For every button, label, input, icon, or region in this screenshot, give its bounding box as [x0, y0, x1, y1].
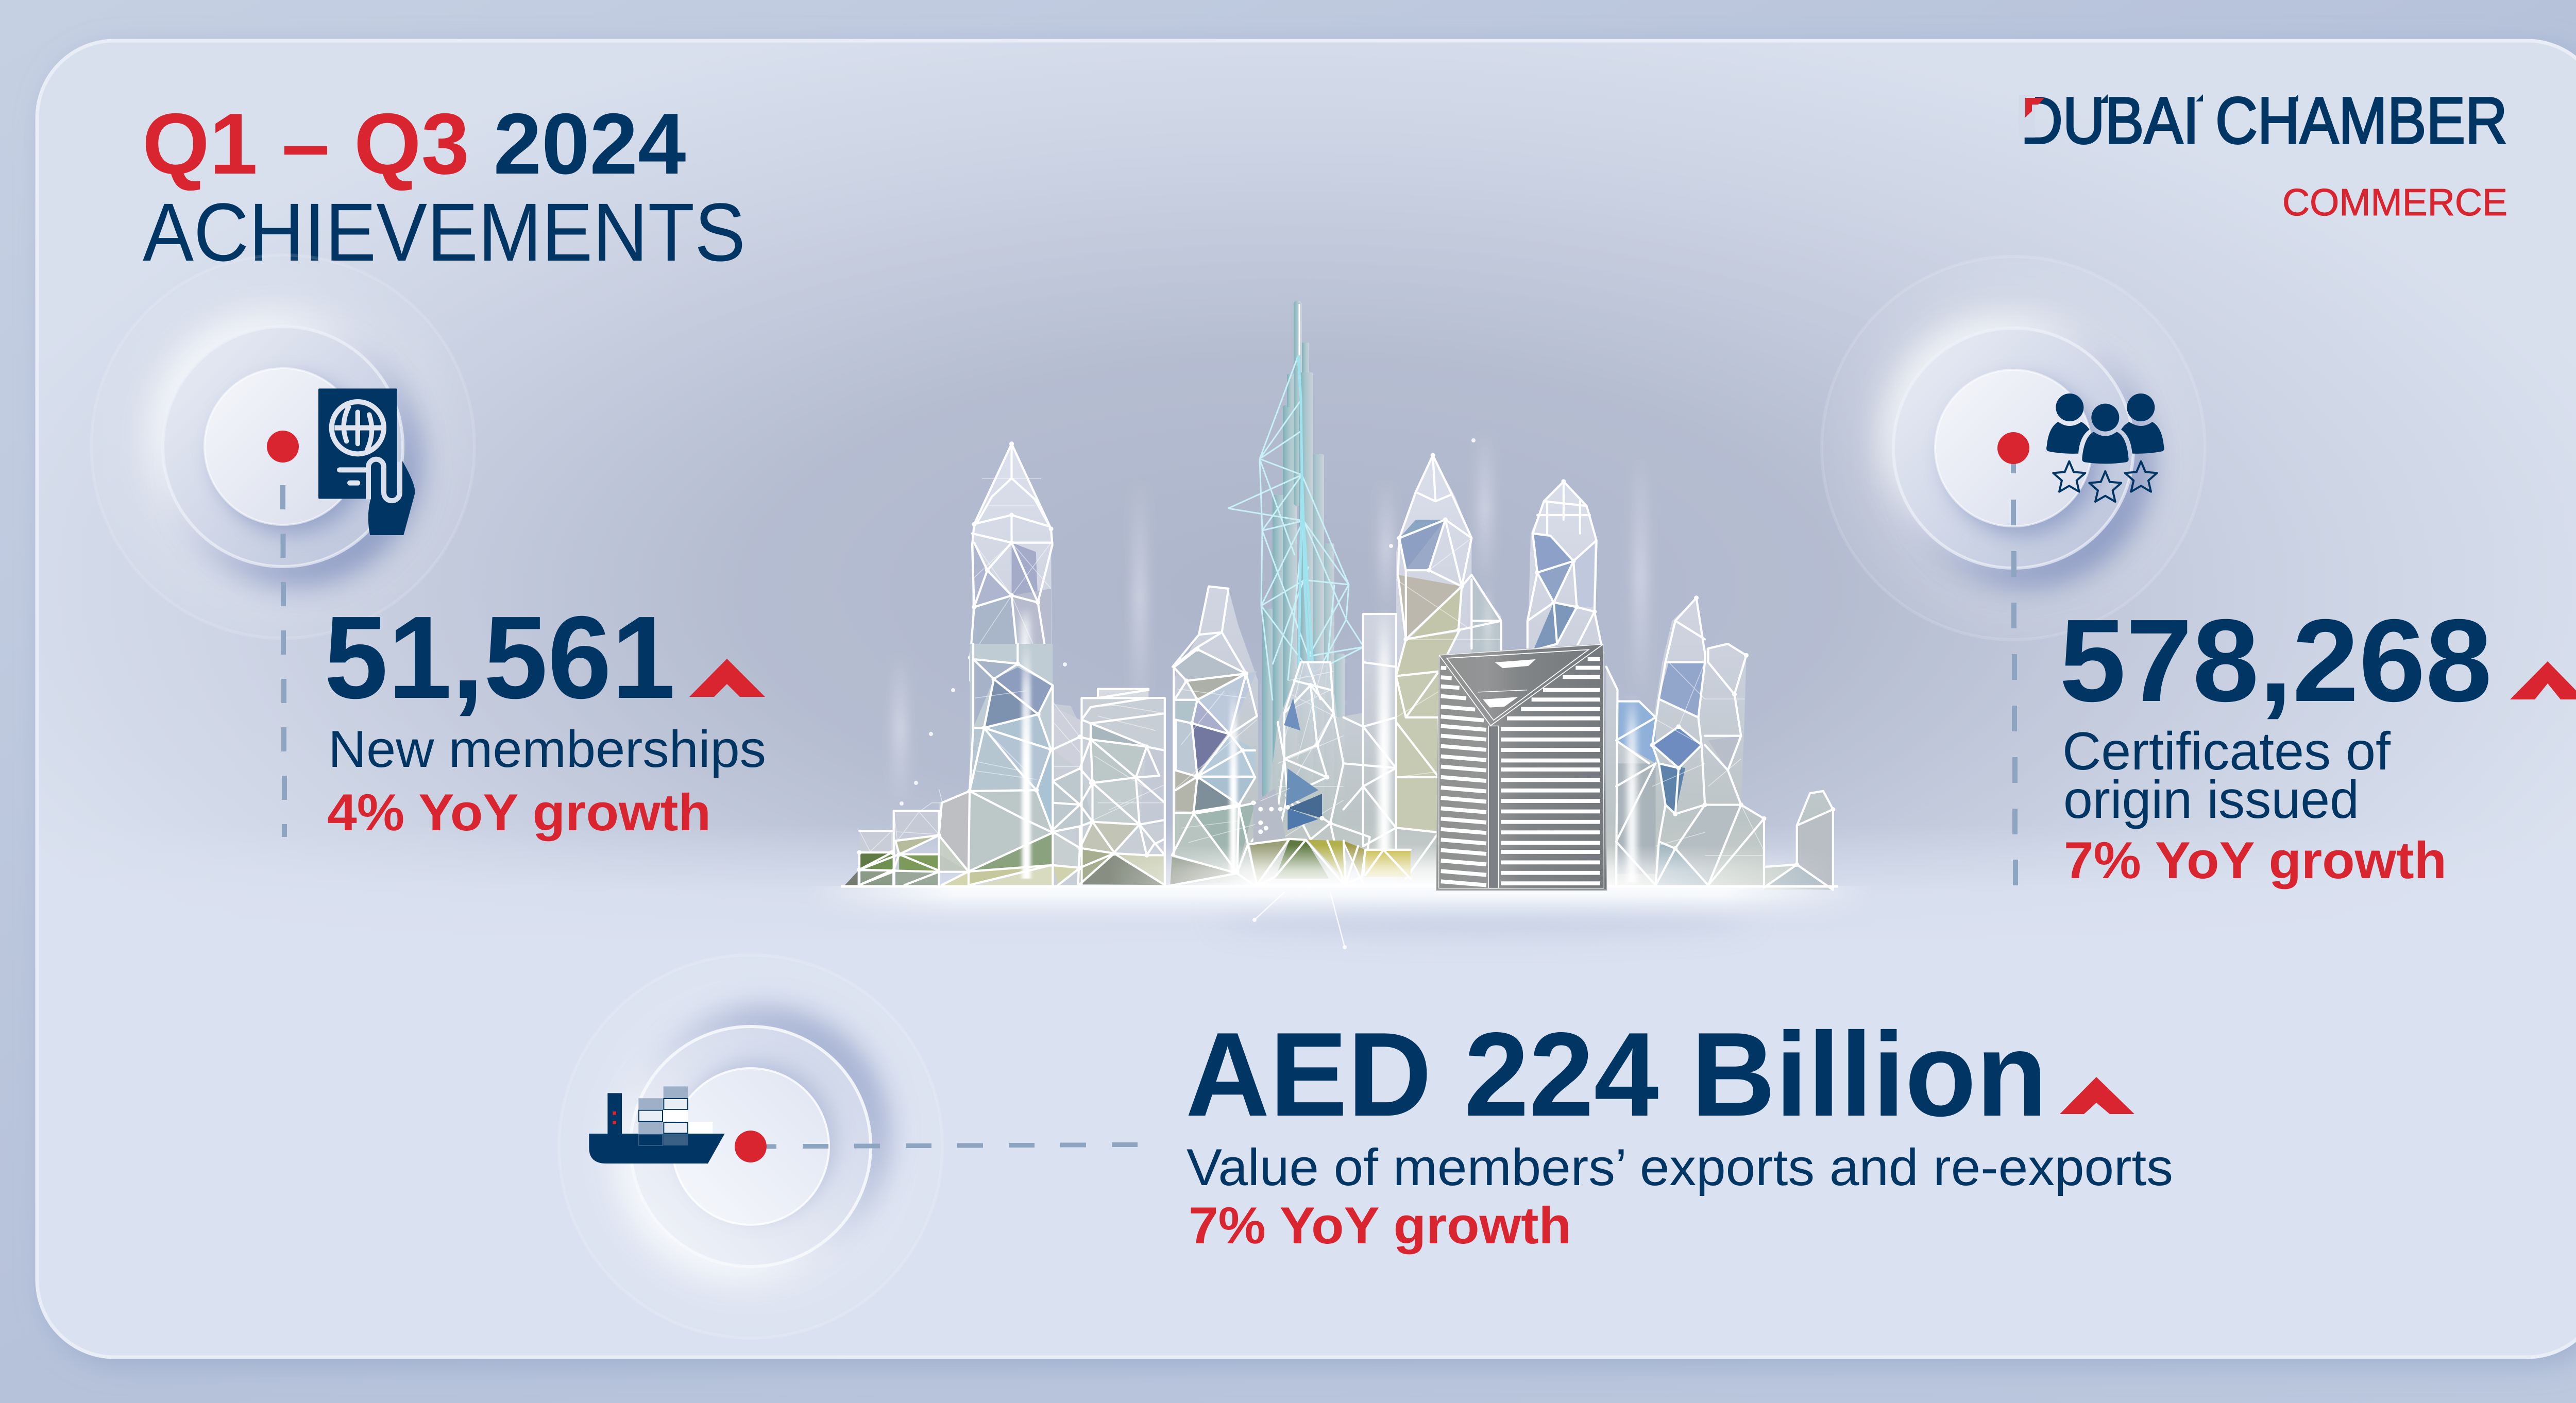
- ground glow: [804, 440, 1875, 947]
- mesh nodes: [970, 444, 1833, 865]
- stat: new memberships: [324, 592, 766, 842]
- arrow: up: [2510, 661, 2576, 699]
- concentric circle: certificates: [1822, 256, 2205, 640]
- icon: passport and hand: [318, 388, 415, 535]
- concentric circle: memberships: [91, 255, 474, 638]
- low-poly towers: [893, 427, 1833, 890]
- title: ACHIEVEMENTS: [143, 186, 745, 278]
- marker dot: certificates: [1997, 432, 2029, 464]
- arrow: up: [689, 659, 765, 697]
- lower-left tower bases: [845, 640, 1411, 886]
- concentric circle: exports: [559, 955, 942, 1338]
- base nodes: [859, 649, 1322, 872]
- stat: exports value: AED 224 Billion: [1185, 1008, 2047, 1141]
- marker dot: memberships: [267, 431, 299, 463]
- fine base mesh: [859, 689, 1290, 851]
- marker dot: exports: [735, 1131, 767, 1162]
- logo: Dubai Chamber Commerce: DUBAI CHAMBER: [2021, 84, 2507, 158]
- shadow and glow under skyline: [1216, 902, 1752, 929]
- title: [142, 95, 745, 278]
- Burj Khalifa tower: [1228, 300, 1364, 830]
- white base mesh: [859, 644, 1411, 886]
- stat: new memberships: 51,561: [324, 592, 675, 723]
- logo: Dubai Chamber Commerce: COMMERCE: [2282, 181, 2507, 224]
- arrow: up: [2060, 1077, 2134, 1114]
- stat: exports value: Value of members’ exports and re-exports: [1187, 1139, 2173, 1196]
- icon: container ship: [589, 1086, 725, 1164]
- fine mesh lines: [970, 478, 1764, 856]
- dashed connector: certificates: [2013, 464, 2015, 885]
- light beams on bases: [1022, 640, 1237, 879]
- stat: certificates of origin: Certificates of: [2062, 722, 2391, 781]
- stat: certificates of origin: 578,268: [2059, 595, 2492, 726]
- stat: new memberships: 4% YoY growth: [327, 784, 711, 842]
- white mesh lines: [970, 444, 1833, 890]
- dashed connector: exports: [767, 1144, 1138, 1147]
- dashed connector: memberships: [283, 485, 284, 837]
- stat: certificates of origin: [2059, 595, 2576, 889]
- icon: people with stars: [2046, 393, 2164, 502]
- tower silhouettes: [970, 441, 1833, 890]
- stat: exports value: [1185, 1008, 2173, 1255]
- stat: new memberships: New memberships: [328, 721, 766, 778]
- colored facets: [970, 520, 1833, 890]
- title: Q1 – Q3 2024: [142, 95, 686, 192]
- skyline illustration: [804, 300, 1875, 947]
- Dubai Chamber building: [1436, 644, 1606, 890]
- faint light beams: [893, 427, 1647, 805]
- bright light beams: [1021, 579, 1637, 883]
- stat: certificates of origin: 7% YoY growth: [2064, 832, 2447, 889]
- logo: Dubai Chamber Commerce: [2019, 84, 2507, 224]
- stat: certificates of origin: origin issued: [2063, 770, 2359, 830]
- facets: [845, 644, 1411, 885]
- stat: exports value: 7% YoY growth: [1189, 1197, 1571, 1255]
